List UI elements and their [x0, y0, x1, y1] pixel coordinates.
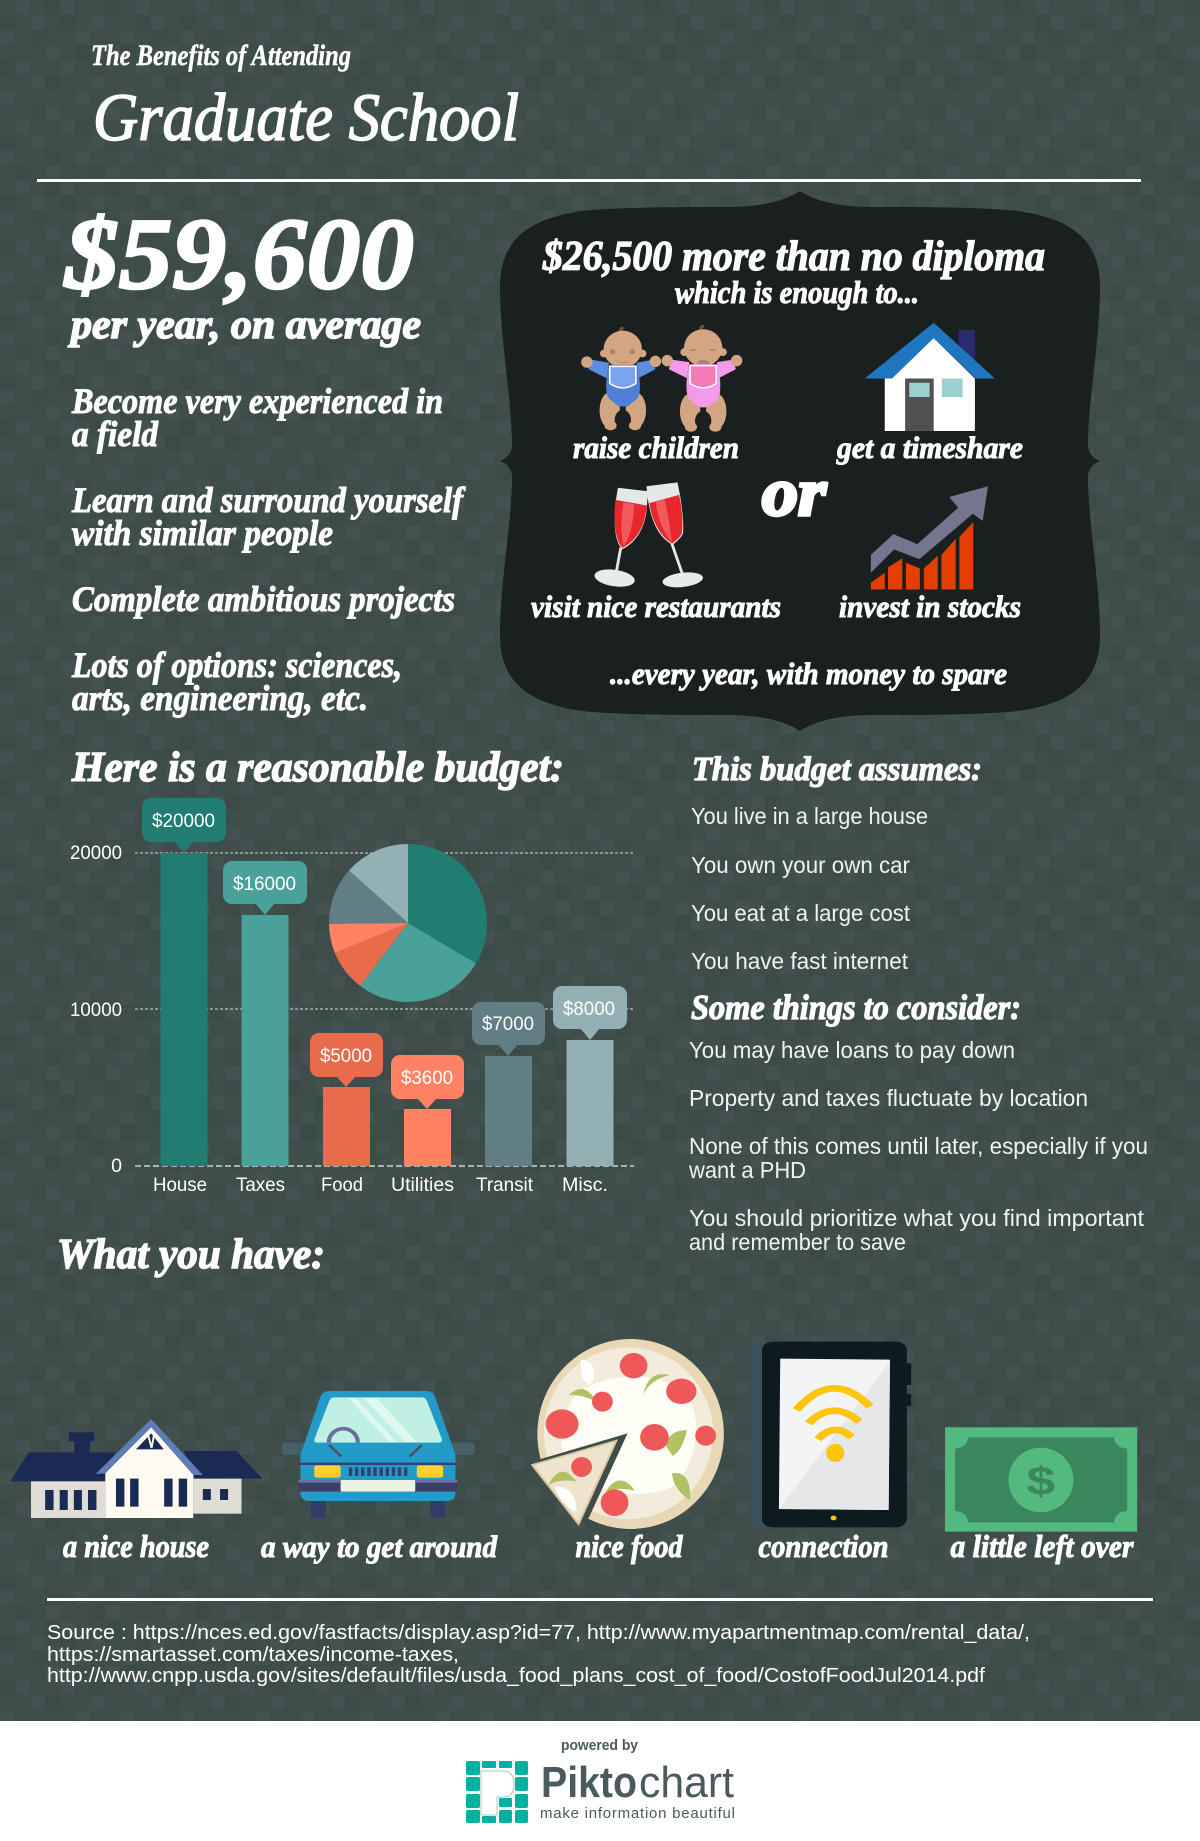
icon: wine glasses: [593, 482, 704, 589]
word: or: or: [762, 454, 827, 530]
heading: assumptions: This budget assumes:: [692, 751, 982, 788]
bars: [160, 853, 614, 1166]
value tooltips: $5000: [320, 1045, 372, 1067]
wordmark: Pikto: [541, 1758, 637, 1807]
plaque background: [500, 191, 1100, 731]
category labels: Misc.: [562, 1174, 608, 1196]
benefit: people: [71, 480, 466, 553]
salary figure: $59,600: [63, 198, 414, 311]
label: connection: connection: [758, 1528, 888, 1564]
benefit: options: [71, 645, 402, 718]
heading: what you have: What you have:: [57, 1232, 325, 1278]
icon: babies: [581, 325, 742, 432]
bar chart: budget: [70, 798, 634, 1196]
benefit: options: arts, engineering, etc.: [72, 678, 368, 718]
label: nice food: nice food: [576, 1528, 683, 1564]
footer: piktochart branding: [0, 1721, 1200, 1841]
axis labels: 10000: [70, 999, 122, 1021]
plaque closing line: ...every year, with money to spare: [610, 656, 1007, 691]
title main: Graduate School: [93, 79, 519, 155]
consider list: You should prioritize what you find important: [689, 1205, 1145, 1231]
icon: stocks chart: [871, 486, 988, 589]
consider list: None of this comes until later, especially if you: [689, 1133, 1148, 1159]
value tooltips: $7000: [482, 1013, 534, 1035]
category labels: Transit: [476, 1174, 534, 1196]
label: a way to get around: a way to get around: [261, 1529, 497, 1564]
panel: what the extra money buys: [500, 191, 1100, 731]
title kicker: The Benefits of Attending: [91, 39, 351, 72]
icon: large house: [10, 1419, 263, 1518]
source text: [47, 1621, 1030, 1687]
panel: what you have: [10, 1339, 1137, 1564]
category labels: House: [153, 1174, 207, 1196]
label: visit nice restaurants: visit nice restaurants: [531, 589, 781, 624]
source text: http://www.cnpp.usda.gov/sites/default/files/usda_food_plans_cost_of_food/CostofFoodJul2014.pdf: [47, 1664, 985, 1687]
label: raise children: raise children: [573, 430, 739, 465]
panel: things to consider: [688, 988, 1148, 1255]
icon: piktochart logo: [466, 1761, 528, 1823]
plaque subheading: which is enough to...: [675, 274, 919, 310]
benefit: experience: Become very experienced in: [71, 381, 443, 421]
salary caption: per year, on average: [68, 301, 421, 347]
axis labels: 0: [111, 1155, 122, 1177]
benefit: experience: [71, 381, 443, 454]
value tooltips: $16000: [233, 873, 296, 895]
icon: banknote: $: [1026, 1458, 1056, 1503]
source text: Source : https://nces.ed.gov/fastfacts/display.asp?id=77, http://www.myapartmentmap.com/rental_data/,: [47, 1621, 1030, 1644]
label: a little left over: a little left over: [950, 1528, 1134, 1564]
consider list: and remember to save: [689, 1229, 906, 1255]
tagline: make information beautiful: [540, 1805, 735, 1822]
icon: car: [282, 1391, 475, 1518]
axis labels: [70, 842, 122, 1177]
icon: tablet with wifi: [751, 1342, 911, 1527]
value tooltips: $3600: [401, 1067, 453, 1089]
plaque heading: $26,500 more than no diploma: [542, 234, 1045, 280]
wordmark: chart: [639, 1758, 734, 1807]
benefit: projects: Complete ambitious projects: [72, 579, 455, 619]
benefit: people: Learn and surround yourself: [71, 480, 466, 520]
icon: banknote: [945, 1427, 1137, 1532]
label: a nice house: a nice house: [63, 1528, 209, 1564]
category labels: Taxes: [236, 1174, 285, 1196]
axis labels: 20000: [70, 842, 122, 864]
assumptions list: You eat at a large cost: [691, 900, 911, 926]
icon: pizza: [532, 1339, 724, 1529]
benefit: experience: a field: [72, 414, 159, 454]
assumptions list: You own your own car: [691, 852, 910, 878]
icon: timeshare house: [865, 323, 995, 431]
value tooltips: $8000: [563, 998, 615, 1020]
panel: budget assumptions: [691, 751, 982, 974]
assumptions list: You live in a large house: [691, 803, 928, 829]
assumptions list: You have fast internet: [691, 948, 909, 974]
category labels: Utilities: [391, 1174, 454, 1196]
benefit: options: Lots of options: sciences,: [71, 645, 402, 685]
consider list: You may have loans to pay down: [689, 1037, 1015, 1063]
consider list: [688, 1037, 1148, 1255]
category labels: Food: [321, 1174, 363, 1196]
title: [91, 39, 519, 155]
consider list: want a PHD: [688, 1157, 806, 1183]
consider list: Property and taxes fluctuate by location: [689, 1085, 1088, 1111]
value tooltips: $20000: [152, 810, 215, 832]
benefit: people: with similar people: [72, 513, 333, 553]
heading: budget: Here is a reasonable budget:: [71, 745, 564, 791]
powered by: powered by: [561, 1737, 639, 1754]
assumptions list: [691, 803, 928, 974]
pie chart: budget share: [329, 844, 487, 1002]
label: get a timeshare: get a timeshare: [836, 430, 1023, 465]
heading: consider: Some things to consider:: [691, 988, 1021, 1027]
value tooltips: [142, 798, 627, 1109]
category labels: [153, 1174, 608, 1196]
label: invest in stocks: invest in stocks: [839, 589, 1021, 624]
panel: salary and benefits: [63, 198, 466, 718]
source text: https://smartasset.com/taxes/income-taxes,: [47, 1643, 459, 1666]
